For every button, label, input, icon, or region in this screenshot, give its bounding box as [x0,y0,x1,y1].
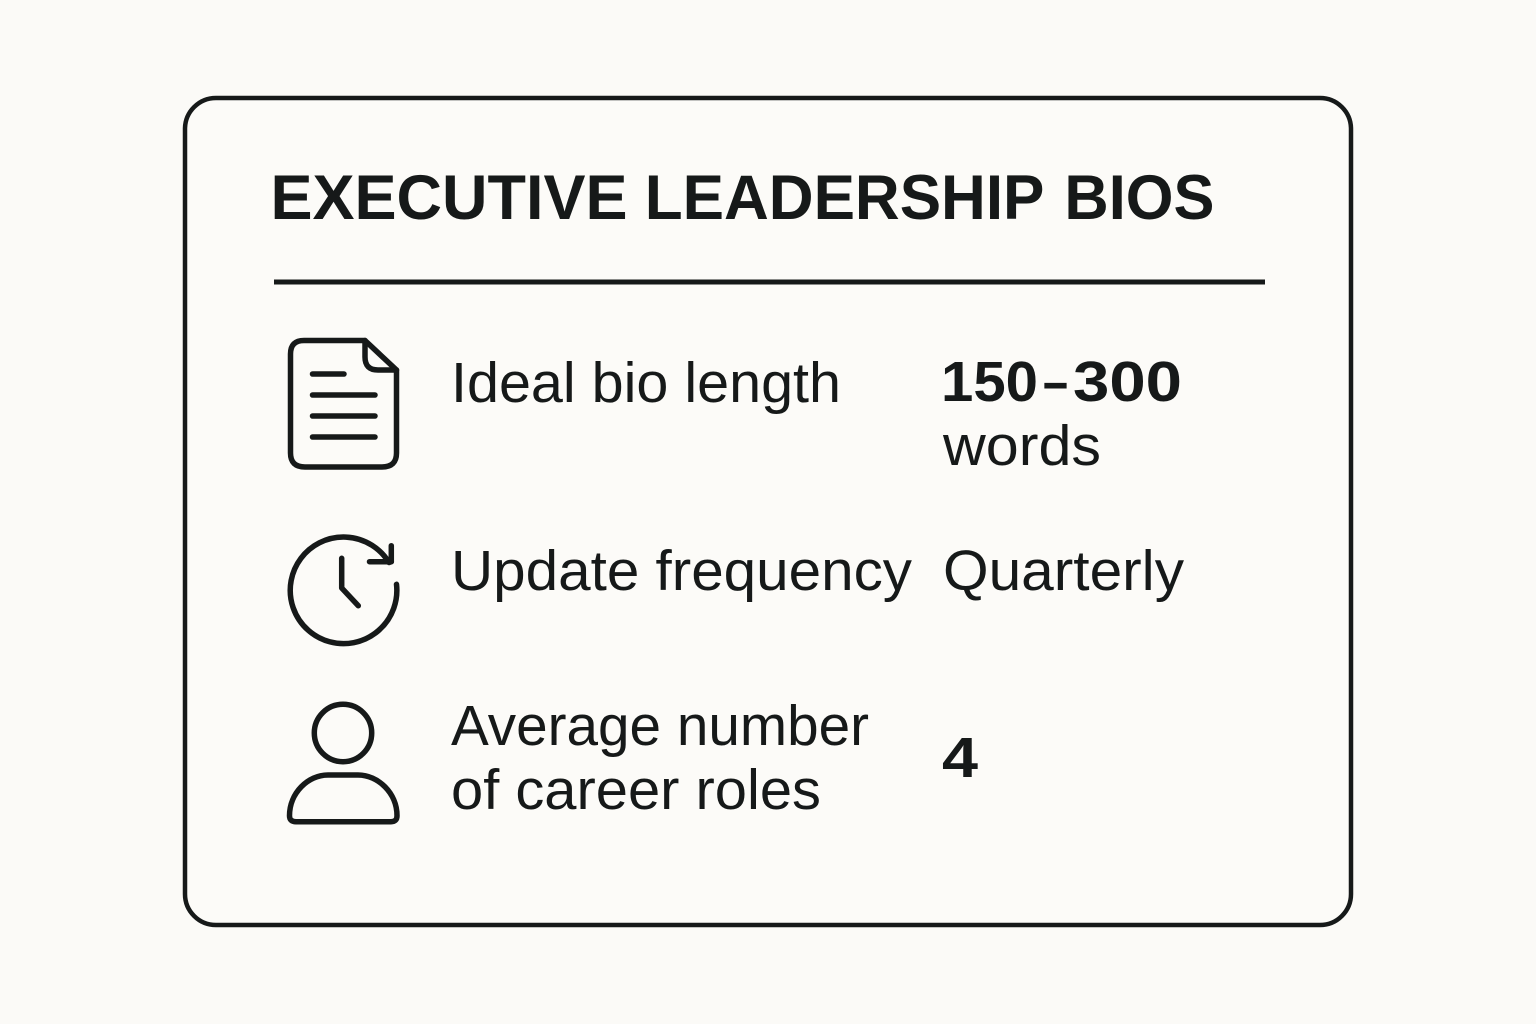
value: quarterly: Quarterly [943,539,1185,603]
label: update frequency: Update frequency [451,539,913,603]
panel: executive leadership bios card [185,98,1351,925]
icon: clock with refresh arrow [290,537,397,644]
label: ideal bio length: Ideal bio length [451,351,841,415]
value: 150–300 words: – [1043,350,1068,414]
title: EXECUTIVE [270,163,628,233]
label: average number of career roles: of career roles [451,758,821,822]
title: LEADERSHIP [645,163,1043,233]
value: 150–300 words [941,350,1182,478]
title: BIOS [1064,163,1214,233]
icon: person [290,704,397,822]
value: 150–300 words: 150 [941,350,1038,414]
value: 150–300 words: words [942,414,1101,478]
value: 4: 4 [942,726,978,790]
icon: document [290,340,396,467]
label: average number of career roles [451,694,869,822]
value: 150–300 words: 300 [1073,350,1182,414]
label: average number of career roles: Average number [451,694,869,758]
